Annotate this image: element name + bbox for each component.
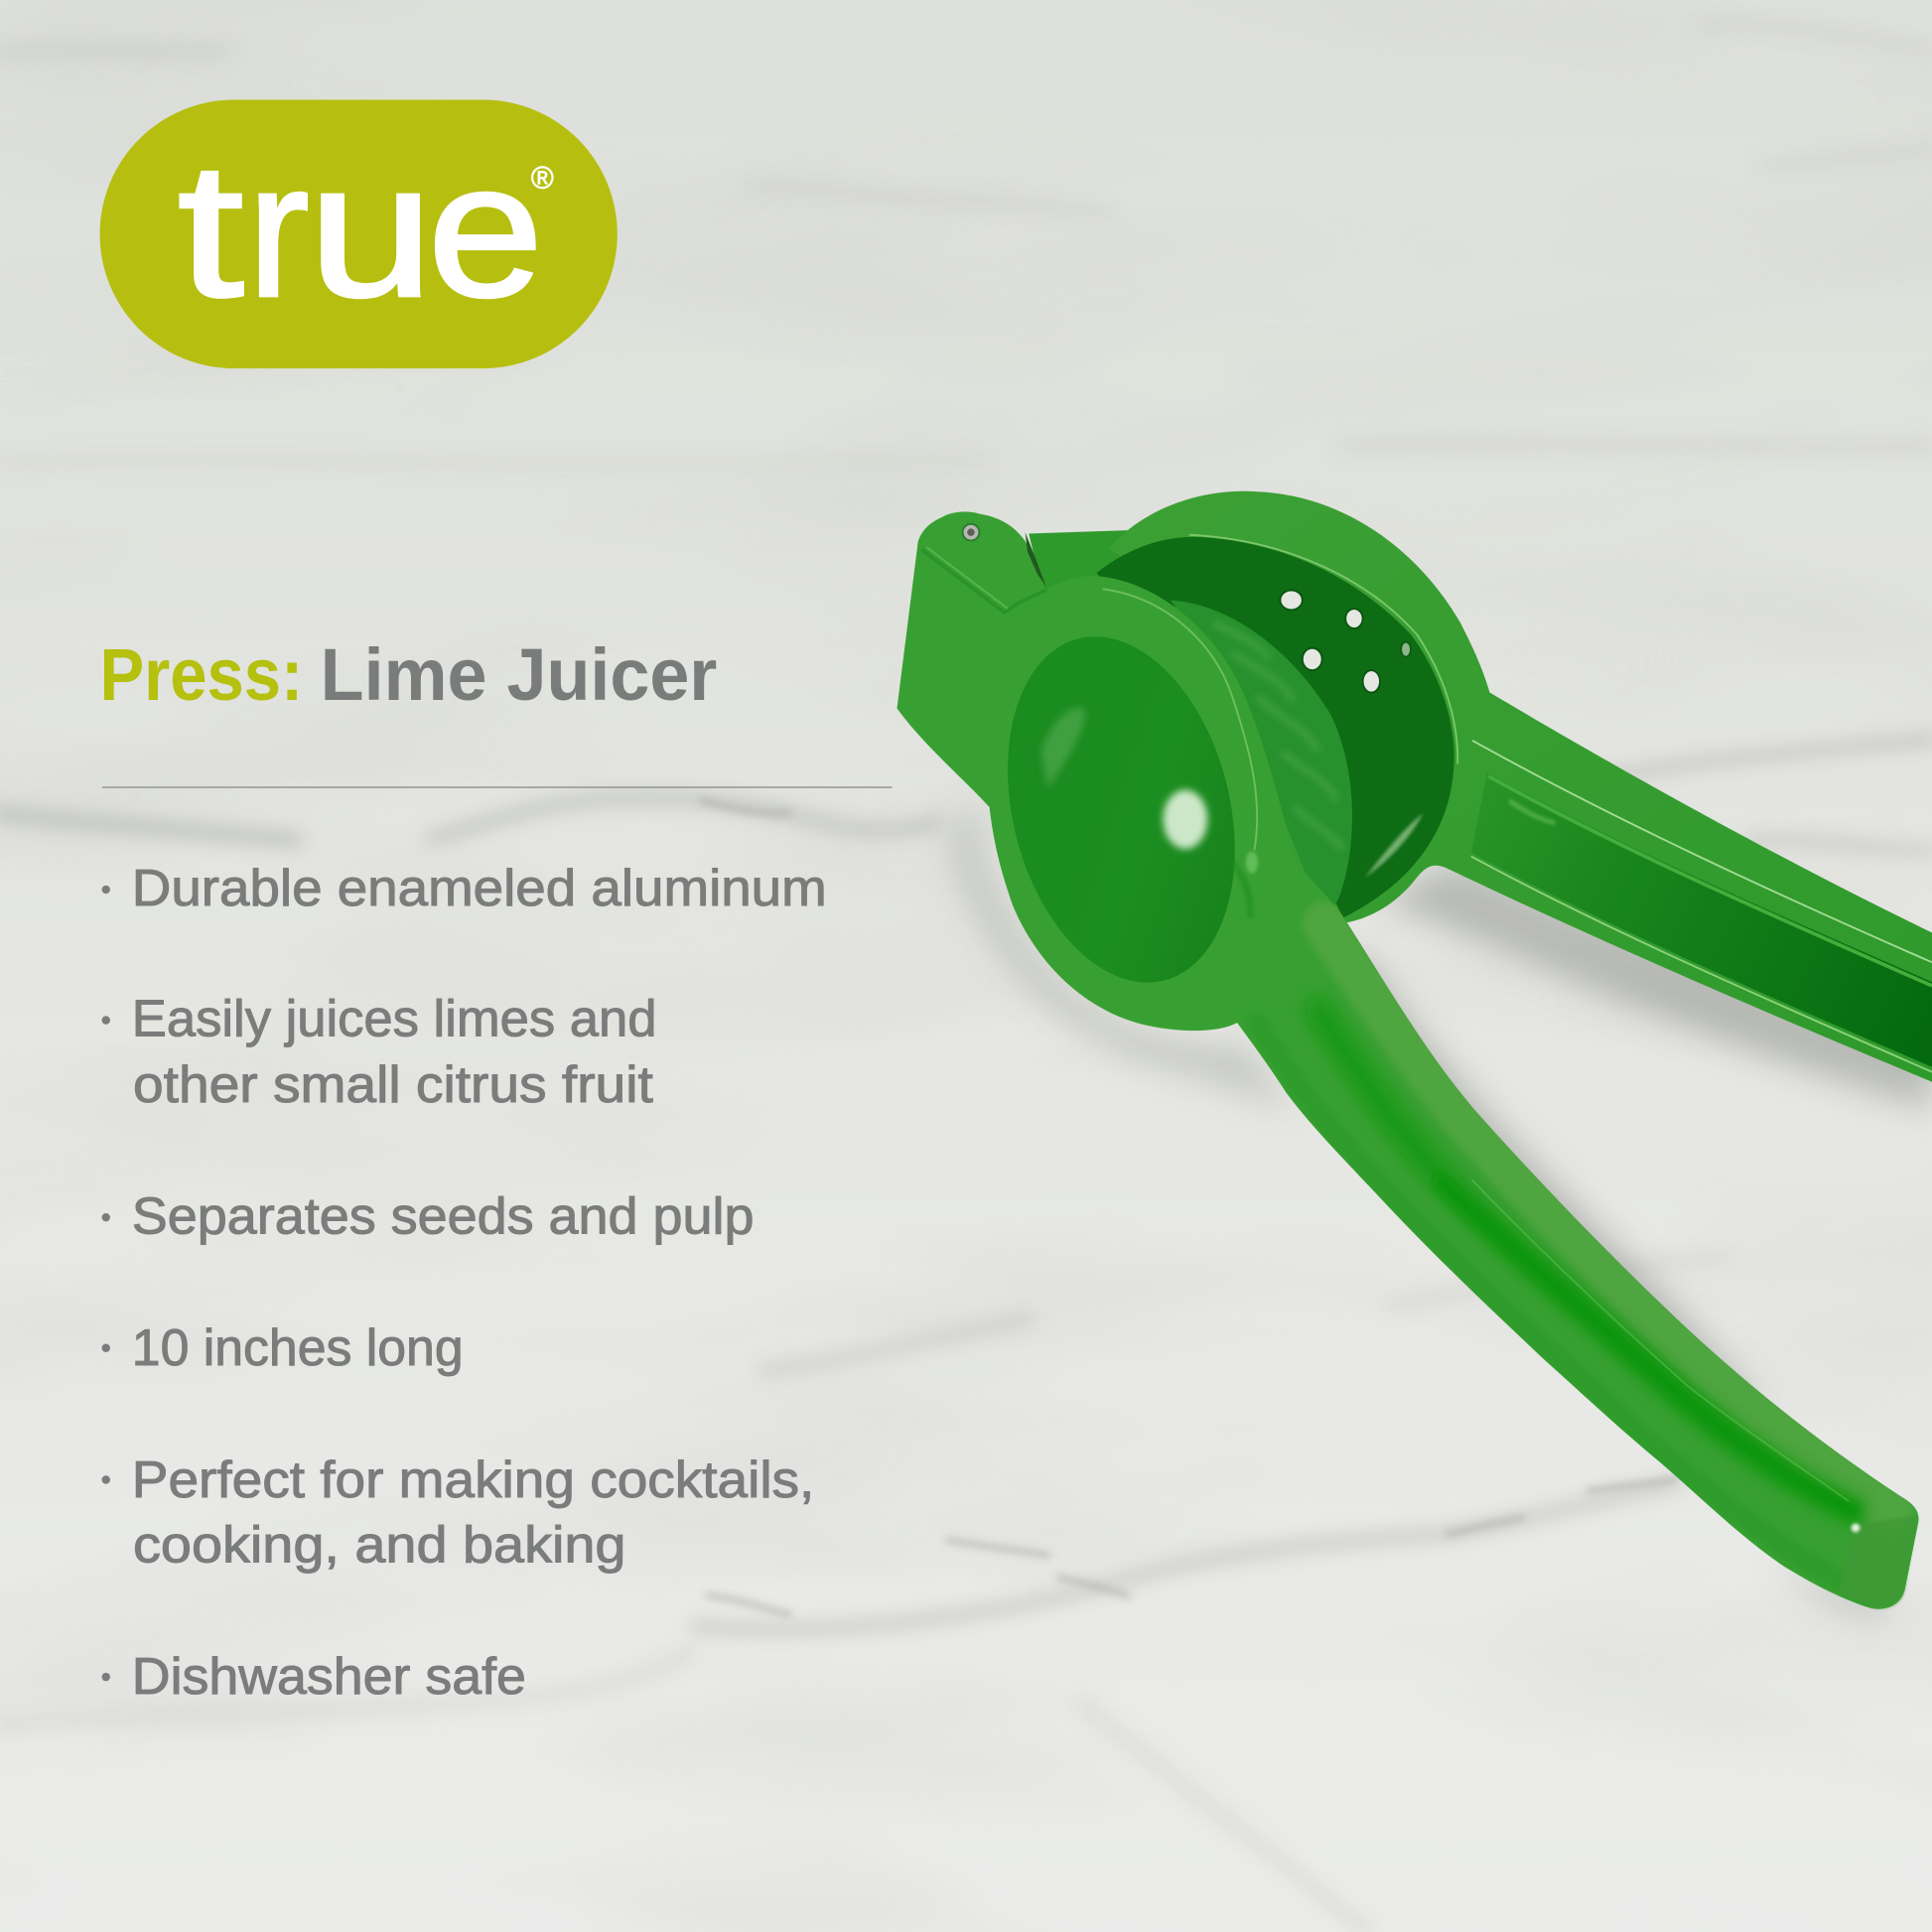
divider — [102, 786, 893, 788]
feature 5: cooking, and baking — [133, 1517, 625, 1575]
heading: Press: — [100, 633, 303, 716]
logo wordmark: u — [308, 123, 434, 337]
hinge gap — [1026, 532, 1046, 587]
rear bowl and upper arm — [1109, 491, 1932, 1082]
rim highlight on rear bowl — [1189, 535, 1457, 763]
logo wordmark: t — [178, 123, 244, 337]
logo pill — [100, 100, 618, 368]
handle shading — [1257, 924, 1891, 1595]
rear bowl interior — [1097, 537, 1454, 918]
feature 6: Dishwasher safe — [132, 1648, 526, 1706]
inner cup — [973, 613, 1269, 1007]
bowl reflection — [1365, 813, 1423, 878]
feature list — [102, 860, 827, 1706]
handle tip facet — [1839, 1516, 1917, 1608]
reamer — [1171, 600, 1352, 910]
feature 5 — [102, 1451, 814, 1575]
feature 2 — [102, 991, 656, 1114]
strainer holes — [1280, 590, 1411, 692]
feature 2: Easily juices limes and — [132, 991, 656, 1048]
hinge screw — [962, 523, 980, 541]
juicer shadows — [949, 801, 1932, 1621]
juicer — [897, 491, 1932, 1609]
feature 2: other small citrus fruit — [133, 1056, 653, 1114]
ring joint glint — [1246, 852, 1258, 874]
front cup and lower handle — [897, 511, 1918, 1609]
feature 4: 10 inches long — [132, 1319, 464, 1377]
feature 1: Durable enameled aluminum — [132, 860, 827, 917]
handle tip glint — [1852, 1524, 1860, 1532]
heading: Lime Juicer — [321, 633, 717, 716]
cup reflections — [1041, 708, 1207, 849]
ring and bracket highlights — [921, 547, 1257, 918]
registered mark: ® — [531, 161, 554, 196]
logo wordmark: r — [247, 123, 310, 337]
feature 3: Separates seeds and pulp — [132, 1187, 755, 1245]
upper arm channel — [1471, 741, 1932, 1072]
connecting strip behind hinge — [1029, 530, 1146, 592]
feature 5: Perfect for making cocktails, — [132, 1451, 814, 1509]
logo wordmark: e — [428, 123, 543, 337]
